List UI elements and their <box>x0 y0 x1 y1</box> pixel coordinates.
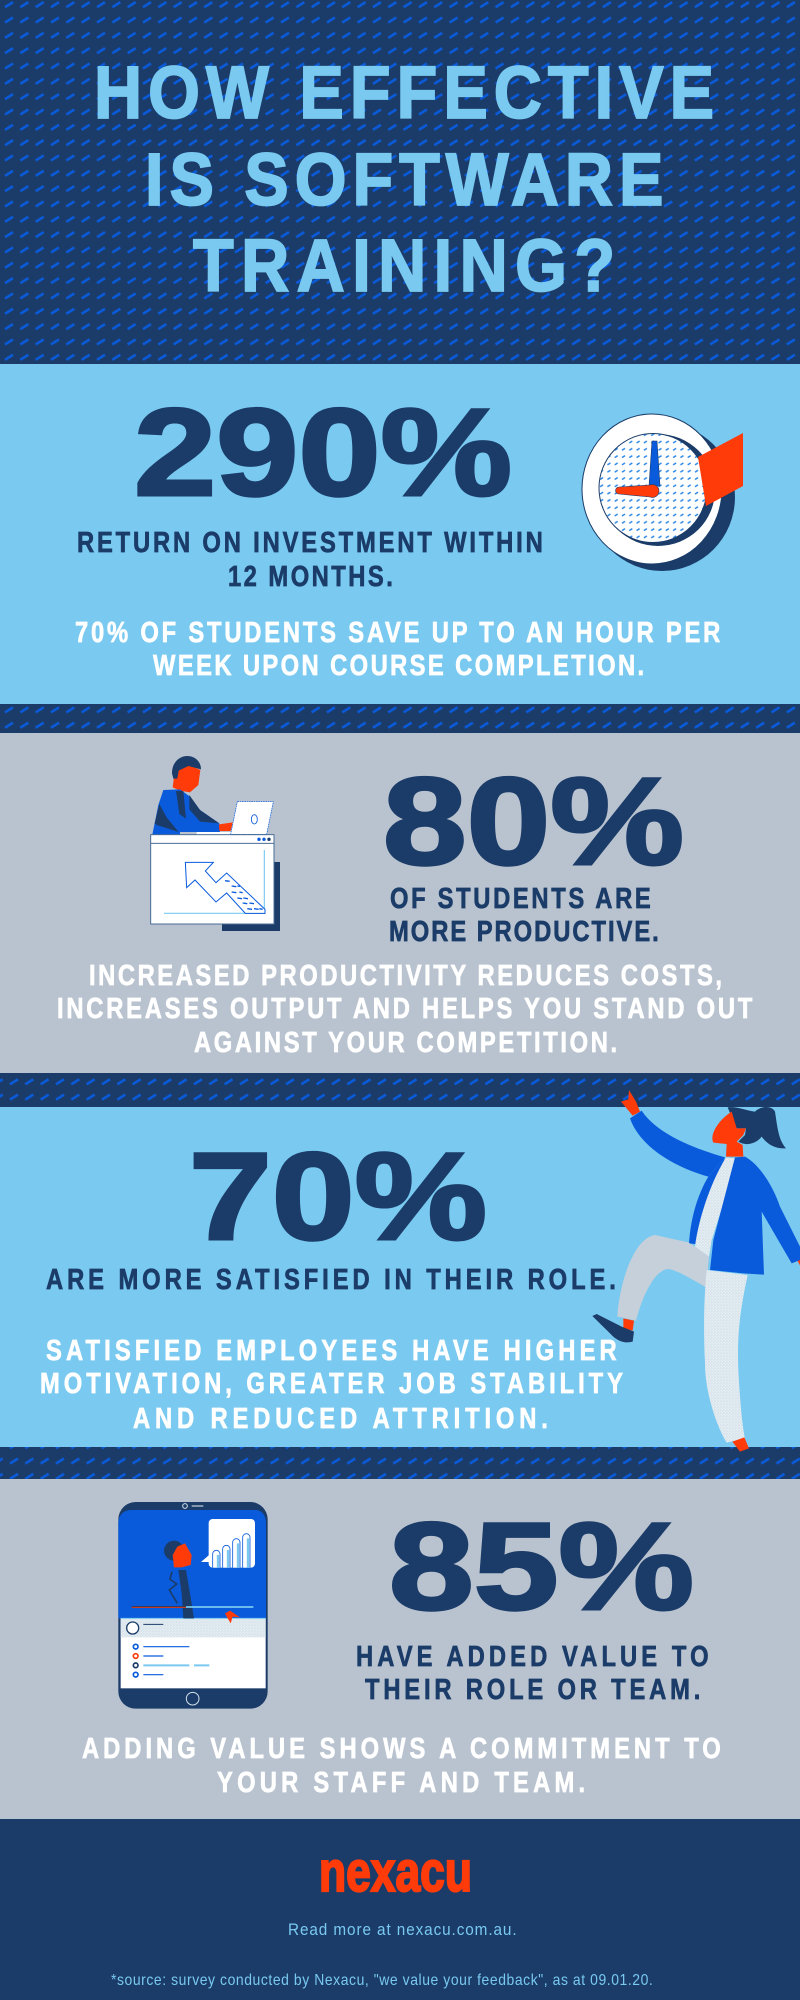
logo: nexacu: nexacu <box>319 1840 472 1904</box>
panel: productivity <box>0 733 800 1073</box>
title: IS SOFTWARE <box>145 138 663 221</box>
panel: footer <box>0 1819 800 2000</box>
text: satisfaction benefits: SATISFIED EMPLOYEES HAVE HIGHER <box>46 1334 617 1367</box>
text: more productive <box>389 882 659 948</box>
text: productivity benefits: INCREASED PRODUCTIVITY REDUCES COSTS, <box>89 959 722 992</box>
text: satisfaction benefits: AND REDUCED ATTRITION. <box>133 1402 548 1435</box>
icon: tablet with presenter <box>118 1502 268 1709</box>
illustration: woman stepping up <box>592 1090 800 1452</box>
panel: satisfaction <box>0 1090 800 1452</box>
text: satisfaction benefits <box>40 1334 623 1435</box>
text: students save time: 70% OF STUDENTS SAVE UP TO AN HOUR PER <box>75 616 720 649</box>
text: more productive: OF STUDENTS ARE <box>390 882 651 915</box>
statistic: 80%: 80% <box>383 753 684 891</box>
text: added value: THEIR ROLE OR TEAM. <box>365 1673 700 1706</box>
text: satisfaction benefits: MOTIVATION, GREATER JOB STABILITY <box>40 1367 623 1400</box>
text: source note: *source: survey conducted by Nexacu, "we value your feedback", as at 09.01.20. <box>111 1972 653 1989</box>
text: productivity benefits: INCREASES OUTPUT AND HELPS YOU STAND OUT <box>57 992 752 1025</box>
text: added value: HAVE ADDED VALUE TO <box>356 1640 709 1673</box>
text: students save time: WEEK UPON COURSE COMPLETION. <box>153 649 644 682</box>
statistic: 85%: 85% <box>389 1498 694 1636</box>
panel: added value <box>0 1479 800 1819</box>
text: return on investment: RETURN ON INVESTMENT WITHIN <box>77 526 543 559</box>
text: productivity benefits: AGAINST YOUR COMPETITION. <box>194 1026 617 1059</box>
text: commitment: YOUR STAFF AND TEAM. <box>217 1766 585 1799</box>
title <box>94 51 714 307</box>
icon: clock <box>582 414 743 571</box>
text: return on investment <box>77 526 543 593</box>
text: commitment: ADDING VALUE SHOWS A COMMITMENT TO <box>82 1732 721 1765</box>
statistic: 70%: 70% <box>189 1128 487 1266</box>
text: read more: Read more at nexacu.com.au. <box>288 1920 517 1939</box>
band: pattern divider <box>0 1447 800 1479</box>
text: students save time <box>75 616 720 682</box>
text: added value <box>356 1640 709 1706</box>
panel: return on investment <box>0 364 800 704</box>
text: commitment <box>82 1732 721 1799</box>
title: HOW EFFECTIVE <box>94 51 714 134</box>
text: productivity benefits <box>57 959 752 1059</box>
title: TRAINING? <box>193 224 615 307</box>
text: more satisfied: ARE MORE SATISFIED IN THEIR ROLE. <box>46 1263 616 1296</box>
band: pattern divider <box>0 704 800 733</box>
panel: header <box>0 0 800 364</box>
text: more productive: MORE PRODUCTIVE. <box>389 915 659 948</box>
statistic: 290%: 290% <box>134 384 512 522</box>
band: pattern divider <box>0 1073 800 1107</box>
text: return on investment: 12 MONTHS. <box>228 560 393 593</box>
icon: man at laptop with chart window <box>151 756 280 931</box>
